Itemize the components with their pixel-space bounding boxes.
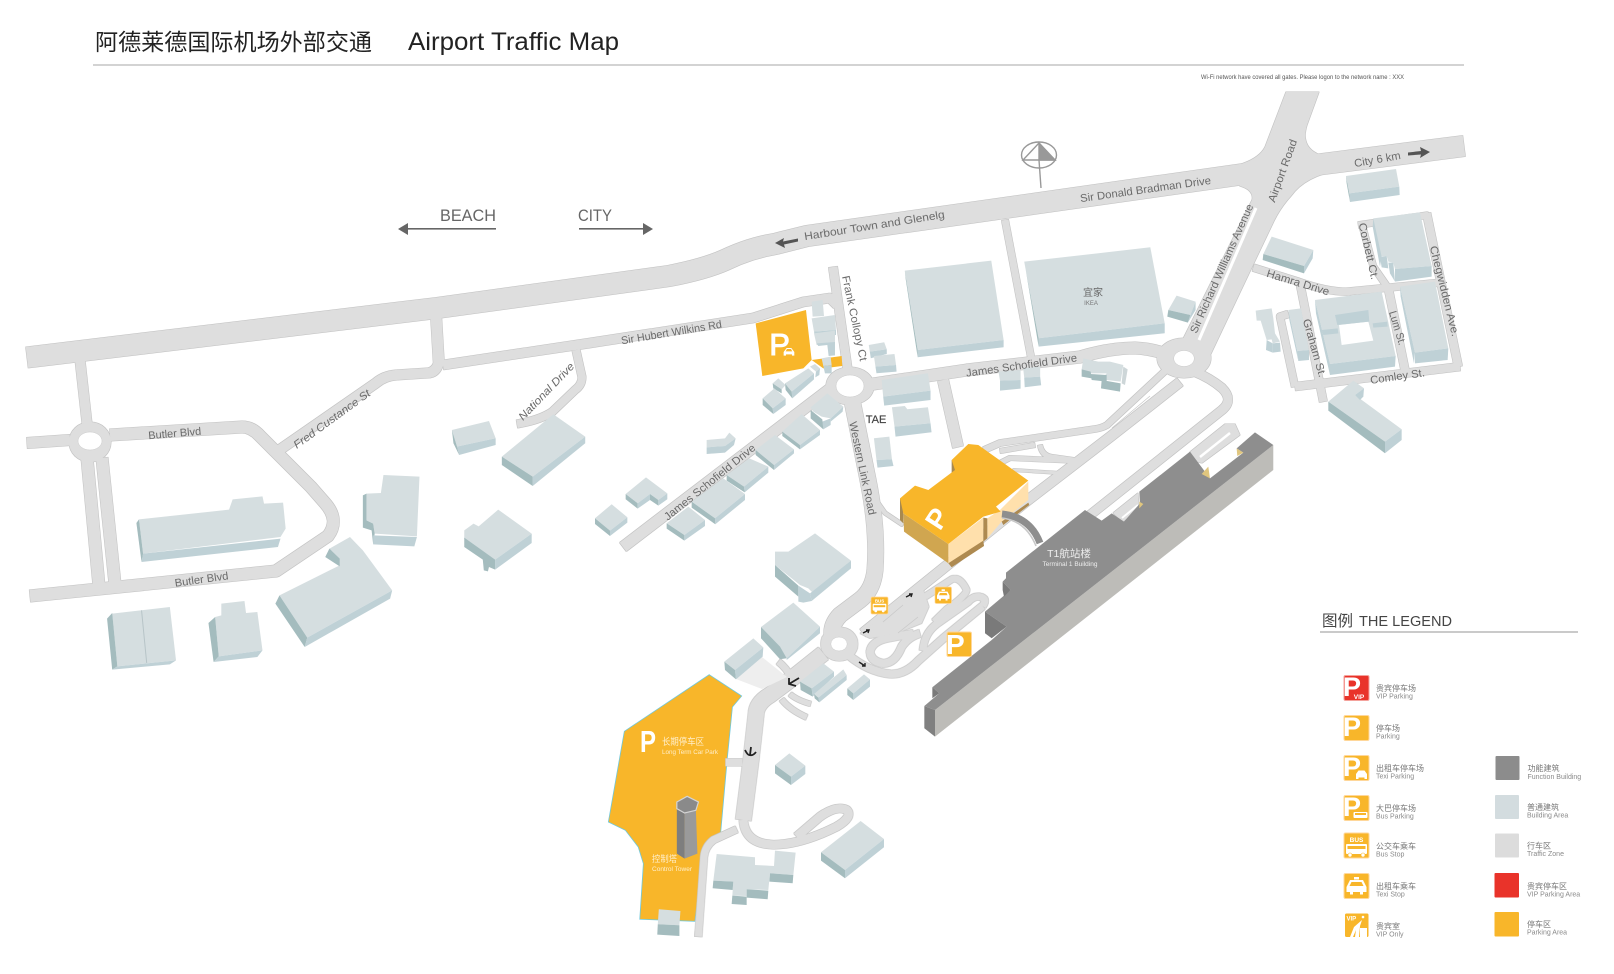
road: north link [80, 360, 87, 423]
legend: taxi parking [1343, 752, 1424, 782]
building: diamond block [464, 510, 532, 571]
label: Lum St: Lum St. [1386, 310, 1408, 347]
legend: VIP parking: VIP Parking [1376, 694, 1413, 700]
road: parking hairpin [923, 597, 985, 651]
label: long term car park: P [640, 724, 656, 759]
road: terminal front [863, 382, 1180, 633]
legend: VIP only: 贵宾室 [1376, 921, 1400, 931]
road: Graham St [1300, 283, 1323, 402]
label: long term car park: Long Term Car Park [662, 750, 719, 756]
road: garage connector [943, 380, 958, 447]
road: gate loop south [1113, 493, 1139, 522]
building: Graham block [1288, 308, 1309, 361]
road: Sir Hubert Wilkins Rd [443, 298, 837, 365]
building: twin blocks [107, 607, 176, 670]
arrow: south access [789, 678, 799, 686]
legend: VIP parking [1343, 672, 1416, 702]
legend title [1322, 612, 1452, 630]
legend title: 图例 [1322, 612, 1353, 630]
map icon: taxi stop [935, 587, 952, 604]
legend: VIP parking area: VIP Parking Area [1527, 892, 1580, 898]
label: Sir Hubert Wilkins Rd: Sir Hubert Wilkins Rd [620, 319, 723, 347]
legend: VIP parking: 贵宾停车场 [1376, 683, 1416, 693]
label: TAE: TAE [866, 414, 886, 426]
legend: bus stop: Bus Stop [1376, 852, 1405, 858]
label: Sir Donald Bradman Drive: Sir Donald Bradman Drive [1079, 175, 1212, 205]
legend: parking area [1494, 912, 1567, 936]
building: Hamra block [1263, 237, 1313, 273]
buildings: central big boxes [869, 247, 1196, 468]
compass [1022, 142, 1056, 188]
road: Sir Donald Bradman Drive [27, 146, 1464, 358]
road: arc stub [778, 662, 791, 677]
legend: building area [1495, 795, 1568, 820]
legend: VIP only [1345, 914, 1404, 938]
legend title: THE LEGEND [1359, 613, 1452, 630]
road: Hamra Drive [1253, 268, 1440, 292]
building: top corner block [1346, 169, 1400, 202]
legend: bus stop: 公交车乘车 [1376, 841, 1416, 851]
road cluster: kerbside lanes [848, 579, 985, 674]
label: Harbour Town and Glenelg: Harbour Town and Glenelg [803, 209, 946, 243]
buildings: south access [713, 638, 884, 905]
building: southern complex [713, 851, 796, 905]
direction: city [578, 206, 653, 235]
label: terminal 1 [1042, 547, 1098, 568]
control tower [677, 796, 698, 859]
building: blocks on James Schofield Drive [998, 367, 1041, 391]
road: service lane [878, 503, 903, 525]
arrow: bus lane 1 [863, 630, 869, 633]
legend: building area: Building Area [1527, 812, 1568, 820]
roundabout: west [69, 422, 111, 462]
legend: VIP parking: VIP [1354, 694, 1365, 701]
legend: VIP parking area: 贵宾停车区 [1527, 881, 1567, 891]
road: terminal link upper [984, 371, 1165, 450]
legend: traffic zone: 行车区 [1527, 840, 1551, 850]
road: Frank Collopy Ct [833, 267, 848, 372]
road: Butler Blvd loop [30, 427, 333, 596]
legend: VIP parking: P [1343, 672, 1361, 702]
road cluster: east streets [1253, 213, 1460, 402]
long term car park [608, 675, 742, 921]
parking: taxi car park [756, 310, 842, 376]
building: row south of road [667, 393, 843, 541]
label: National Drive: National Drive [516, 361, 577, 423]
road: west loop [1280, 314, 1295, 387]
road network [27, 92, 1464, 937]
legend: function building: 功能建筑 [1528, 763, 1560, 773]
road cluster: south access [698, 627, 858, 937]
buildings: east district [1256, 169, 1448, 453]
label: City 6 km: City 6 km [1353, 150, 1402, 170]
label: Corbett Ct: Corbett Ct. [1356, 222, 1380, 281]
title: 阿德莱德国际机场外部交通 [95, 29, 372, 55]
multi-storey car park [900, 444, 1029, 567]
legend: bus parking [1343, 792, 1416, 822]
legend: taxi parking: Texi Parking [1376, 774, 1414, 780]
map icon: bus stop: BUS [875, 598, 884, 603]
building: large warehouse [905, 261, 1004, 357]
label: Frank Collopy Ct: Frank Collopy Ct [839, 275, 869, 362]
direction: city: CITY [578, 206, 612, 225]
building: row north of road [707, 364, 820, 454]
buildings: west district [107, 475, 532, 670]
legend: bus parking: 大巴停车场 [1376, 803, 1416, 813]
road: Airport Road [1180, 92, 1340, 360]
label: Butler Blvd upper: Butler Blvd [148, 426, 202, 442]
legend: bus stop [1344, 833, 1416, 858]
road: south curved road [743, 653, 823, 820]
label: Airport Road: Airport Road [1266, 138, 1300, 204]
building: west lots [595, 477, 667, 536]
road: National Drive [517, 350, 582, 424]
building: block by the roundabout [761, 603, 820, 660]
legend: VIP only: VIP Only [1376, 932, 1404, 938]
title: Airport Traffic Map [408, 28, 619, 56]
road: arc two [782, 699, 807, 717]
arrows on roads [745, 594, 912, 755]
label: terminal 1: Terminal 1 Building [1042, 562, 1098, 568]
building: car park kiosk [657, 909, 680, 936]
map icon: parking: P [946, 629, 965, 660]
building: block east of road [363, 475, 419, 546]
street labels [148, 138, 1461, 590]
arrow: westbound on Harbour road [775, 238, 798, 248]
building: Corbett block [1373, 212, 1432, 282]
legend: VIP parking area [1494, 873, 1580, 898]
arrow: lower lane [859, 662, 865, 666]
road: forecourt thin lane [1013, 470, 1060, 473]
building: long block [136, 496, 286, 562]
arrow: bus lane 2 [906, 594, 912, 597]
road: departures loop [1090, 372, 1228, 515]
building: wide block near National Drive [502, 414, 585, 486]
roundabout: lower [821, 627, 858, 661]
building: roundabout block J [800, 663, 834, 697]
title [95, 28, 619, 56]
road: arc one [790, 694, 811, 704]
building: stepped small block [1256, 308, 1281, 353]
legend: taxi stop [1344, 874, 1416, 898]
building: Lum block [1400, 282, 1448, 363]
label: Butler Blvd lower: Butler Blvd [174, 570, 229, 590]
legend: taxi stop: Texi Stop [1376, 892, 1405, 898]
road: Fred Custance St [275, 362, 439, 453]
legend: parking [1343, 712, 1400, 742]
road: serpentine lane [870, 633, 920, 663]
label: IKEA [1083, 286, 1103, 307]
walkway bridge [1002, 514, 1040, 546]
road: Chegwidden Ave [1427, 213, 1458, 367]
legend: taxi parking: P [1343, 752, 1361, 782]
label: long term car park: 长期停车区 [662, 736, 704, 748]
label: Western Link Road: Western Link Road [846, 421, 878, 516]
building: small block L [847, 674, 870, 700]
wifi note: Wi-Fi network have covered all gates. Please logon to the network name : XXX [1201, 75, 1404, 81]
building: large block near Western Link [775, 533, 851, 603]
label: control tower: Control Tower [652, 867, 692, 873]
parking: taxi car park: P [769, 328, 790, 362]
building: stepped block [208, 601, 262, 662]
label: Chegwidden Ave: Chegwidden Ave. [1427, 245, 1461, 338]
building: small box near IKEA [1167, 296, 1196, 323]
building: roundabout block K [814, 669, 847, 702]
road: Lum St [1388, 288, 1405, 370]
legend: traffic zone [1495, 834, 1564, 858]
building: north of Butler small [452, 421, 496, 455]
road: James Schofield Drive east [860, 348, 1170, 386]
map icon: bus stop [871, 597, 888, 614]
label: long term car park [640, 724, 719, 759]
legend: parking: Parking [1376, 734, 1400, 740]
road: James Schofield Drive diagonal [623, 385, 835, 547]
road: bus bay [860, 590, 929, 638]
road: twin lane west [87, 458, 99, 586]
road: taxi lane [925, 579, 967, 622]
legend: bus stop: BUS [1350, 837, 1364, 844]
label: IKEA: 宜家 [1083, 286, 1103, 299]
label: Fred Custance St: Fred Custance St [291, 387, 374, 451]
road: Western Link Road [832, 400, 876, 646]
road: forecourt lanes [998, 445, 1080, 464]
legend: bus parking: P [1343, 792, 1361, 822]
label: Sir Richard Williams Avenue: Sir Richard Williams Avenue [1188, 202, 1256, 335]
roundabout: east [1157, 338, 1211, 378]
legend: taxi parking: 出租车停车场 [1376, 763, 1424, 773]
label: Hamra Drive: Hamra Drive [1265, 268, 1331, 298]
label: control tower: 控制塔 [652, 853, 677, 864]
legend: parking: 停车场 [1376, 723, 1400, 733]
arrow: to city [1408, 147, 1430, 158]
road details: islands and medians [78, 208, 1256, 689]
label: Graham St: Graham St. [1300, 318, 1328, 379]
road: Corbett Ct [1358, 215, 1428, 288]
direction: beach [398, 206, 496, 235]
legend: parking area: 停车区 [1527, 919, 1551, 929]
road: Butler Blvd west stub [27, 440, 70, 443]
legend: traffic zone: Traffic Zone [1527, 851, 1564, 858]
building: stack one [812, 300, 836, 373]
label: control tower [652, 853, 692, 873]
building: small cube [775, 753, 805, 785]
multi-storey car park: P [919, 502, 955, 535]
building: courtyard block [1315, 292, 1396, 375]
road: south loop [743, 808, 849, 845]
label: James Schofield Drive diagonal: James Schofield Drive [662, 442, 758, 523]
road: connector [436, 315, 439, 366]
arrow: south road [745, 747, 756, 755]
legend: parking area: Parking Area [1527, 930, 1567, 936]
legend: bus parking: Bus Parking [1376, 814, 1414, 820]
legend: function building: Function Building [1528, 774, 1581, 781]
road: car park access [726, 751, 742, 773]
building: blocks near TAE [869, 342, 932, 468]
label: IKEA: IKEA [1084, 301, 1098, 307]
buildings: Schofield strip [595, 300, 843, 541]
label: Comley St: Comley St. [1370, 367, 1426, 387]
road: lower kerb lane [848, 606, 983, 674]
building: IKEA [1024, 247, 1165, 347]
road: gate loop north [1190, 424, 1240, 463]
road: to south [698, 829, 737, 937]
label: terminal 1: T1航站楼 [1047, 547, 1091, 560]
road: Comley St [1295, 367, 1460, 387]
legend: function building [1496, 756, 1581, 781]
roundabout: Frank Collopy [826, 367, 874, 405]
building: cluster at east roundabout [1082, 358, 1128, 392]
legend: parking: P [1343, 712, 1361, 742]
buildings: south of the junction [761, 533, 851, 660]
direction: beach: BEACH [440, 206, 496, 225]
legend: taxi stop: 出租车乘车 [1376, 881, 1416, 891]
building: southeast block [821, 821, 884, 878]
legend: VIP only: VIP [1346, 916, 1356, 922]
legend: building area: 普通建筑 [1527, 802, 1559, 812]
road: twin lane east [102, 458, 115, 584]
label: James Schofield Drive east: James Schofield Drive [965, 352, 1078, 380]
building: angled block [275, 537, 392, 647]
building: L block [1328, 381, 1402, 453]
terminal 1 building [924, 432, 1273, 737]
building: block west of access [724, 638, 763, 679]
road: middle connector [1005, 220, 1031, 357]
